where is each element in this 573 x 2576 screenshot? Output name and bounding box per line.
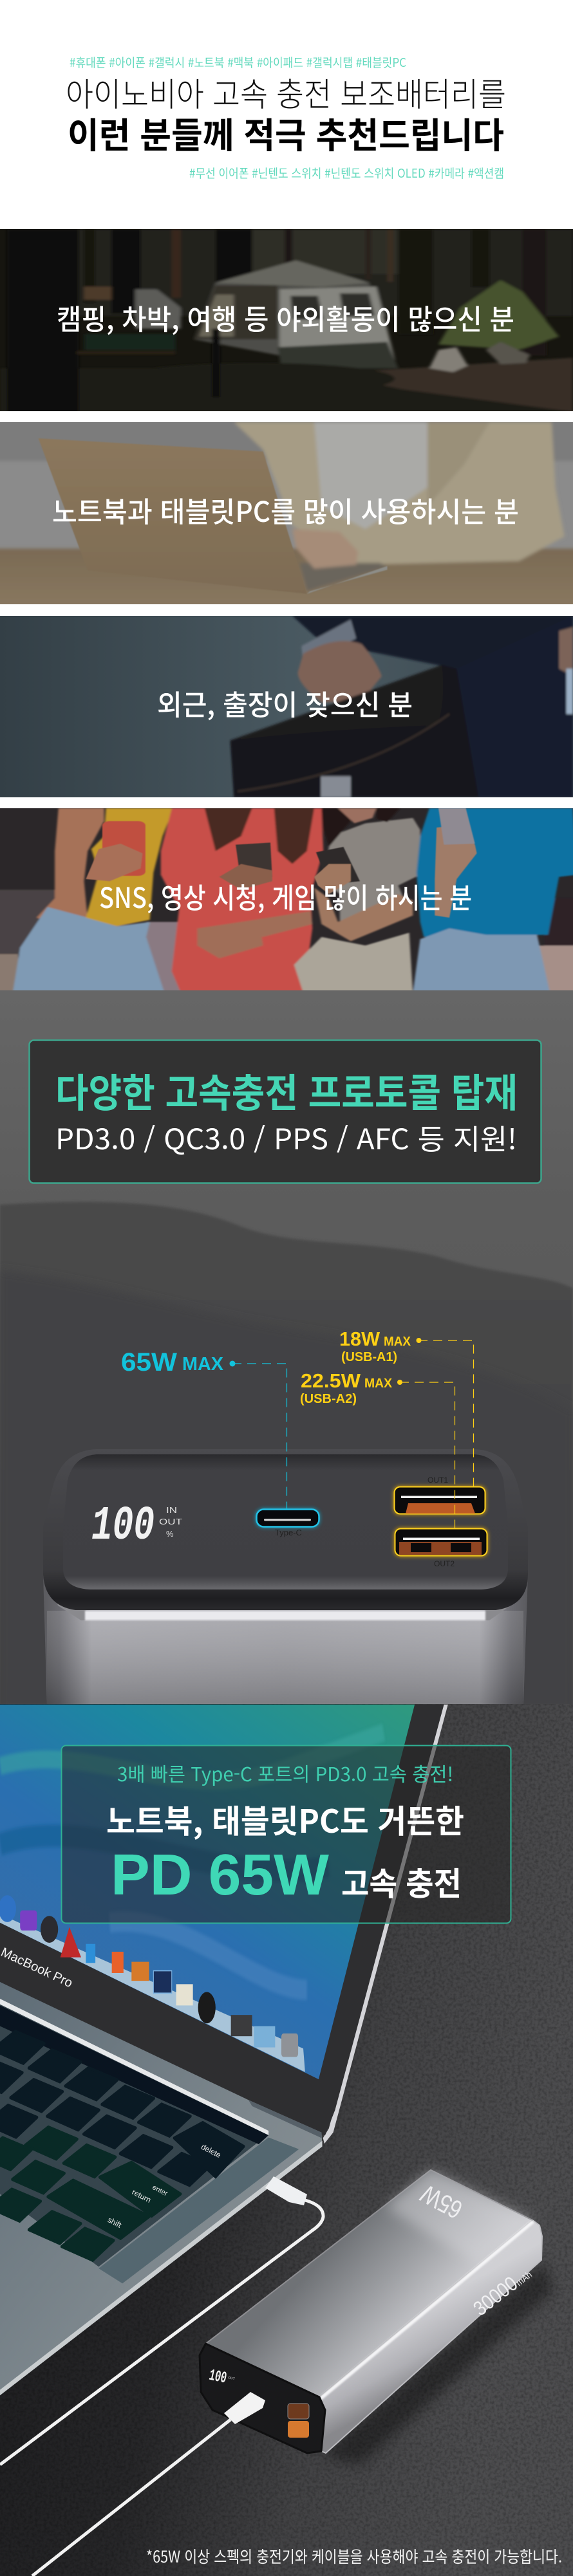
power bank front view	[43, 1449, 528, 1705]
box line 3: fast charging: 고속 충전	[341, 1858, 462, 1905]
callout: 65W MAX: MAX	[182, 1354, 224, 1375]
upper lighter end	[386, 2170, 532, 2265]
caption: camping: 캠핑, 차박, 여행 등 야외활동이 많으신 분	[57, 297, 514, 338]
laptop labels: delete	[200, 2142, 223, 2160]
rocks	[429, 347, 467, 372]
caption: business trip: 외근, 출장이 잦으신 분	[157, 682, 413, 723]
bushes	[164, 363, 395, 386]
laptop labels	[0, 1945, 223, 2230]
callout: 18W MAX USB-A1	[339, 1328, 474, 1487]
power bank angled	[32, 2170, 554, 2576]
keys	[0, 2031, 244, 2185]
title line 2: 이런 분들께 적극 추천드립니다	[68, 107, 504, 158]
laptop labels: enter	[151, 2183, 169, 2198]
callout: 18W MAX USB-A1: (USB-A1)	[341, 1350, 397, 1364]
body	[43, 1527, 528, 1705]
heading box	[30, 1040, 541, 1183]
laptop labels: return	[131, 2187, 153, 2205]
display readout: IN	[166, 1505, 177, 1515]
ports	[288, 2404, 309, 2419]
wallpaper	[0, 1705, 415, 2079]
shirt	[234, 422, 565, 565]
caption: smartphone: SNS, 영상 시청, 게임 많이 하시는 분	[99, 875, 472, 916]
panel: protocol section	[0, 990, 573, 1712]
highlight	[52, 1589, 520, 1620]
port: USB-A1: OUT1	[427, 1476, 448, 1485]
power bank labels: 65W	[416, 2179, 467, 2224]
box line 1: 3배 빠른 Type-C 포트의 PD3.0 고속 충전!	[117, 1759, 453, 1787]
hashtags bottom: #무선 이어폰 #닌텐도 스위치 #닌텐도 스위치 OLED #카메라 #액션캠	[189, 164, 504, 181]
callout: 22.5W MAX USB-A2: MAX	[364, 1376, 393, 1391]
callout: 65W MAX	[121, 1348, 287, 1509]
port: USB-A2	[395, 1528, 487, 1568]
power bank labels: OUT	[228, 2376, 235, 2381]
small tent left	[135, 290, 181, 329]
box line 3: PD 65W: PD 65W	[111, 1843, 329, 1907]
shadow	[322, 2262, 554, 2465]
hand	[298, 641, 382, 703]
picnic table	[85, 334, 175, 350]
port: USB-A2: OUT2	[434, 1559, 455, 1568]
power bank labels	[207, 2179, 535, 2388]
suit	[292, 616, 572, 670]
power bank labels: 30000mAh	[469, 2261, 535, 2321]
heading line 2: PD3.0 / QC3.0 / PPS / AFC 등 지원!	[55, 1117, 517, 1158]
dock shelf	[0, 1914, 305, 2072]
briefcase	[230, 665, 478, 797]
callout: 18W MAX USB-A1: MAX	[384, 1335, 411, 1349]
usb-c plug and cable	[32, 2420, 230, 2576]
top face	[206, 2170, 532, 2397]
bezel	[0, 1705, 444, 2135]
dock icons	[0, 1895, 298, 2057]
usb-c cable to laptop	[0, 2176, 323, 2465]
power bank labels: 100	[207, 2366, 229, 2388]
box line 2: 노트북, 태블릿PC도 거뜬한	[106, 1796, 464, 1842]
header block	[66, 53, 506, 181]
laptop	[0, 1705, 448, 2395]
edge highlight	[321, 2221, 533, 2398]
callout: 22.5W MAX USB-A2	[300, 1369, 455, 1528]
callout: 22.5W MAX USB-A2: 22.5W	[301, 1369, 361, 1392]
display readout: OUT	[159, 1517, 182, 1526]
rim	[43, 1449, 528, 1610]
display readout: %	[166, 1529, 174, 1539]
port: USB-A1	[394, 1476, 485, 1514]
panel: smartphone users photo	[0, 808, 573, 995]
panel: laptop photo	[0, 422, 573, 604]
laptop labels: shift	[106, 2215, 123, 2230]
callout: 22.5W MAX USB-A2: (USB-A2)	[300, 1392, 357, 1406]
top face	[63, 1454, 508, 1589]
green tent	[438, 280, 559, 350]
side face	[319, 2220, 542, 2453]
laptop labels: MacBook Pro	[0, 1945, 75, 1990]
port: Type-C: Type-C	[275, 1528, 302, 1537]
callout: 18W MAX USB-A1: 18W	[339, 1328, 380, 1350]
text box: PD 65W	[62, 1745, 511, 1923]
port: Type-C	[256, 1509, 319, 1537]
screen back edge	[323, 1705, 448, 2144]
callout: 65W MAX: 65W	[121, 1348, 177, 1376]
laptop lid	[39, 438, 307, 594]
title line 1: 아이노비아 고속 충전 보조배터리를	[66, 68, 506, 116]
display readout: 100	[91, 1499, 155, 1553]
keyboard deck	[0, 1982, 323, 2395]
panel: business trip photo	[0, 616, 573, 797]
black end face	[200, 2344, 325, 2453]
panel: laptop charging section	[0, 1704, 573, 2576]
hashtags top: #휴대폰 #아이폰 #갤럭시 #노트북 #맥북 #아이패드 #갤럭시탭 #태블릿PC	[70, 53, 406, 71]
panel: camping photo	[0, 229, 573, 413]
desk background	[0, 1704, 573, 2576]
heading line 1: 다양한 고속충전 프로토콜 탑재	[55, 1061, 518, 1118]
caption: laptop: 노트북과 태블릿PC를 많이 사용하시는 분	[52, 489, 519, 530]
main tent	[196, 271, 372, 357]
